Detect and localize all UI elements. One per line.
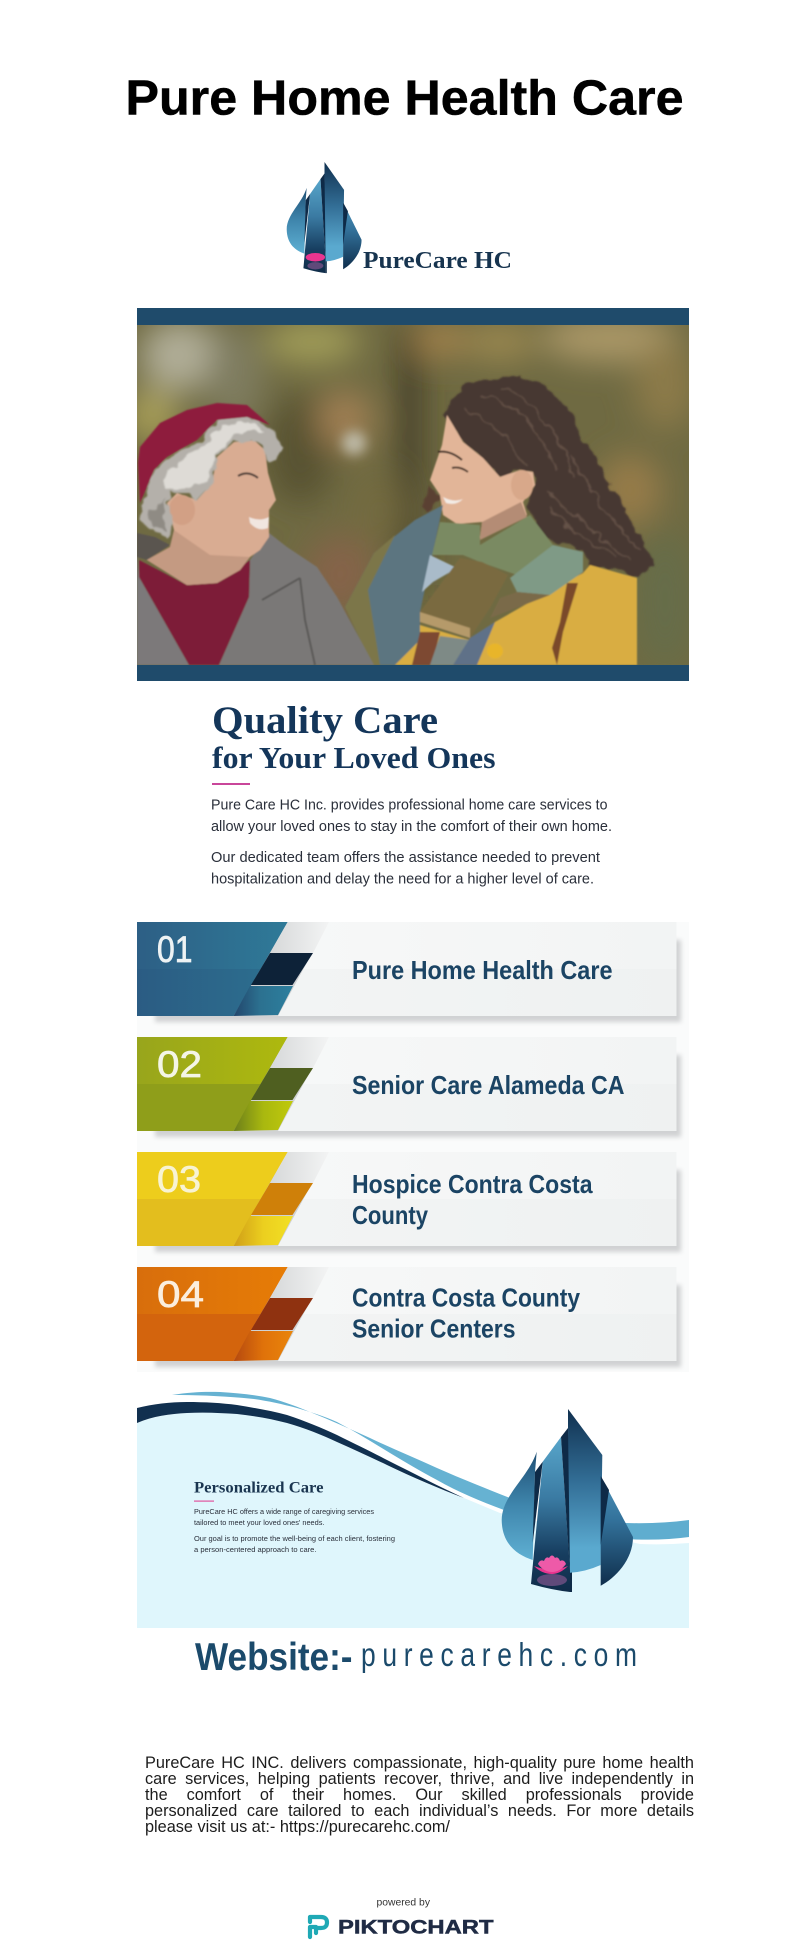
face and neck — [430, 415, 535, 538]
coat and strap — [390, 565, 637, 665]
bottom bar — [137, 665, 689, 681]
top bar — [137, 308, 689, 325]
text: personalized care: Personalized Care — [194, 1480, 324, 1496]
sweater — [139, 560, 250, 665]
body copy: allow your loved ones to stay in the comfort of their own home. — [211, 819, 612, 835]
navy swoosh — [137, 1402, 464, 1498]
website line: Website:- — [195, 1636, 352, 1679]
card 04: 04 — [157, 1274, 204, 1315]
footer: powered by piktochart — [308, 1896, 494, 1940]
body copy: Our dedicated team offers the assistance needed to prevent — [211, 850, 600, 866]
card 03: Hospice Contra Costa — [352, 1169, 593, 1199]
text: personalized care — [194, 1480, 395, 1554]
card 01: Pure Home Health Care — [352, 955, 612, 985]
list: services — [137, 922, 689, 1372]
panel: personalized care — [137, 1392, 689, 1628]
icon: piktochart mark — [310, 1917, 327, 1937]
hair — [142, 416, 285, 537]
body copy: hospitalization and delay the need for a higher level of care. — [211, 872, 594, 888]
text block: description: care services, helping patients recover, thrive, and live independently in — [145, 1770, 694, 1788]
beret — [138, 403, 270, 503]
logo: PureCare HC — [287, 162, 512, 274]
footer: powered by piktochart: powered by — [376, 1896, 431, 1908]
title: Pure Home Health Care — [126, 72, 684, 126]
footer: powered by piktochart: PIKTOCHART — [338, 1918, 494, 1938]
text block: quality care — [211, 699, 612, 888]
card 02: Senior Care Alameda CA — [352, 1070, 625, 1100]
card 04: Contra Costa County — [352, 1283, 580, 1313]
panel: photo banner — [126, 308, 695, 681]
icon: droplet logo small — [287, 162, 362, 273]
card 03 — [137, 1152, 681, 1252]
card 04: Senior Centers — [352, 1314, 516, 1344]
card 04 — [137, 1267, 681, 1367]
text block: description: PureCare HC INC. delivers compassionate, high-quality pure home health — [145, 1754, 694, 1772]
text block: description: personalized care tailored to each individual’s needs. For more details — [145, 1802, 694, 1820]
logo: PureCare HC: PureCare HC — [363, 248, 512, 274]
card 01: 01 — [157, 929, 192, 970]
photo: caregiver and elderly woman — [126, 314, 695, 670]
text: personalized care: a person-centered approach to care. — [194, 1547, 317, 1554]
coat — [137, 547, 189, 665]
icon: droplet logo large — [502, 1409, 633, 1592]
pale background — [137, 1413, 689, 1628]
card 02: 02 — [157, 1044, 202, 1085]
scarf — [367, 504, 444, 665]
body copy — [211, 798, 612, 888]
body copy: Pure Care HC Inc. provides professional home care services to — [211, 798, 608, 814]
text block: description — [145, 1754, 694, 1836]
heading: Quality Care — [212, 699, 438, 742]
website line — [195, 1636, 637, 1679]
card 03: 03 — [157, 1159, 201, 1200]
hair — [443, 375, 655, 578]
face and neck — [166, 440, 277, 558]
text: personalized care: Our goal is to promote the well-being of each client, fostering — [194, 1536, 395, 1543]
text block: description: please visit us at:- https://purecarehc.com/ — [145, 1818, 450, 1836]
light blue swoosh — [172, 1392, 510, 1510]
young woman — [345, 375, 655, 665]
card 01 — [137, 922, 681, 1022]
older woman — [137, 403, 374, 665]
card 02 — [137, 1037, 681, 1137]
subheading: for Your Loved Ones — [212, 740, 495, 775]
website line: purecarehc.com — [361, 1637, 637, 1674]
card 03: County — [352, 1200, 428, 1230]
text block: description: the comfort of their homes. Our skilled professionals provide — [145, 1786, 694, 1804]
text: personalized care: PureCare HC offers a wide range of caregiving services — [194, 1509, 375, 1516]
text: personalized care: tailored to meet your loved ones' needs. — [194, 1520, 325, 1527]
